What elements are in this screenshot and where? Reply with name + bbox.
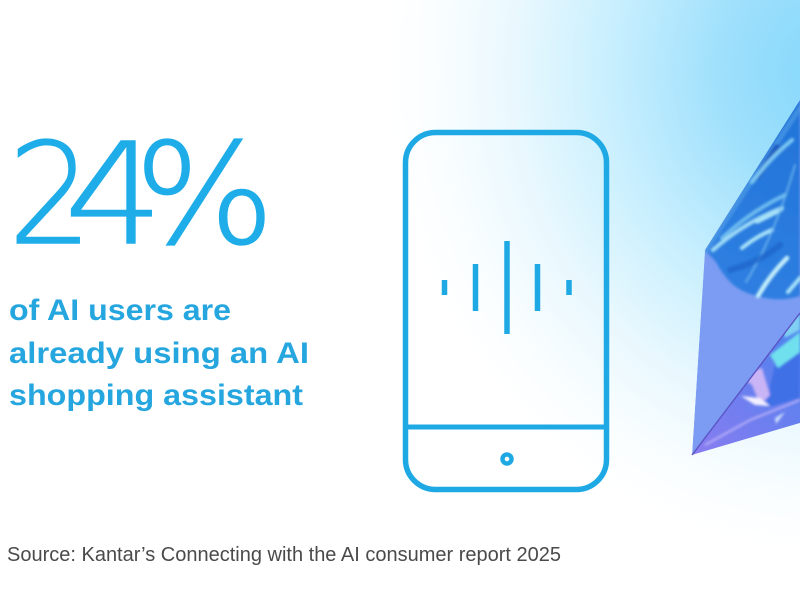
description text: shopping assistant bbox=[9, 379, 303, 412]
source line: Source: Kantar’s Connecting with the AI consumer report 2025 bbox=[7, 544, 561, 566]
big statistic: 24% bbox=[8, 114, 275, 277]
crystal prism with leaf reflection bbox=[692, 95, 800, 455]
icon: smartphone with voice waveform bbox=[405, 132, 607, 490]
description text bbox=[9, 294, 309, 412]
big statistic: 24%: % bbox=[134, 114, 275, 277]
big statistic: 24%: 4 bbox=[64, 114, 164, 277]
description text: of AI users are bbox=[9, 294, 231, 327]
crystal upper facet bbox=[692, 95, 800, 455]
description text: already using an AI bbox=[9, 337, 309, 370]
crystal facet edge bbox=[692, 313, 800, 455]
icon: home button bbox=[502, 454, 512, 464]
crystal lower facet bbox=[692, 313, 800, 455]
big statistic: 24%: 2 bbox=[8, 114, 93, 277]
icon: voice waveform bbox=[444, 241, 569, 334]
